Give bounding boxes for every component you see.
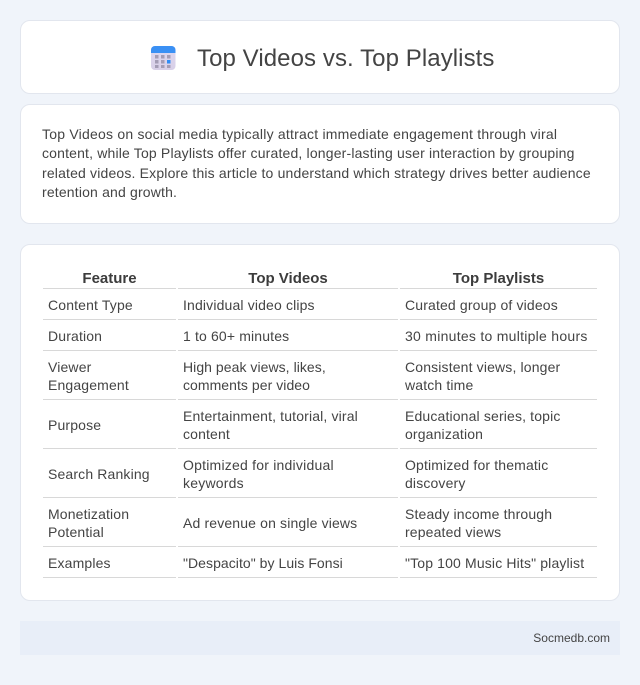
comparison table: comments per video: [183, 377, 310, 393]
comparison table: watch time: [405, 377, 473, 393]
comparison table: Engagement: [48, 377, 129, 393]
comparison table: Search Ranking: [48, 466, 150, 482]
comparison table: discovery: [405, 475, 465, 491]
comparison table: organization: [405, 426, 483, 442]
panel: introduction card: [20, 104, 620, 224]
comparison table: Purpose: [48, 417, 101, 433]
comparison table: High peak views, likes,: [183, 359, 326, 375]
icon: calendar: [151, 46, 176, 70]
comparison table: Viewer: [48, 359, 91, 375]
comparison table: Entertainment, tutorial, viral: [183, 408, 358, 424]
comparison table: 1 to 60+ minutes: [183, 328, 289, 344]
panel: title card: [20, 20, 620, 94]
intro paragraph: content, while Top Playlists offer curated, longer-lasting user interaction by grouping: [42, 145, 575, 161]
comparison table: Content Type: [48, 297, 133, 313]
comparison table: Monetization: [48, 506, 129, 522]
intro paragraph: retention and growth.: [42, 184, 177, 200]
comparison table: "Top 100 Music Hits" playlist: [405, 555, 584, 571]
comparison table: Examples: [48, 555, 111, 571]
comparison table: "Despacito" by Luis Fonsi: [183, 555, 343, 571]
comparison table: Top Playlists: [453, 270, 544, 287]
intro paragraph: Top Videos on social media typically attract immediate engagement through viral: [42, 126, 557, 142]
comparison table: repeated views: [405, 524, 501, 540]
comparison table: Feature: [82, 270, 137, 287]
intro paragraph: related videos. Explore this article to understand which strategy drives better audience: [42, 165, 591, 181]
comparison table: Optimized for individual: [183, 457, 334, 473]
comparison table: Optimized for thematic: [405, 457, 548, 473]
comparison table: Top Videos: [248, 270, 328, 287]
footer bar: [20, 621, 620, 655]
comparison table: Steady income through: [405, 506, 552, 522]
comparison table: Individual video clips: [183, 297, 315, 313]
footer brand text: Socmedb.com: [533, 631, 610, 645]
title: Top Videos vs. Top Playlists: [197, 45, 495, 72]
comparison table: Potential: [48, 524, 104, 540]
comparison table: Educational series, topic: [405, 408, 561, 424]
comparison table: content: [183, 426, 230, 442]
intro paragraph: [42, 126, 591, 200]
panel: comparison table card: [20, 244, 620, 601]
comparison table: Duration: [48, 328, 102, 344]
comparison table: Ad revenue on single views: [183, 515, 357, 531]
comparison table: 30 minutes to multiple hours: [405, 328, 588, 344]
comparison table: Curated group of videos: [405, 297, 558, 313]
comparison table: Consistent views, longer: [405, 359, 560, 375]
comparison table: keywords: [183, 475, 244, 491]
